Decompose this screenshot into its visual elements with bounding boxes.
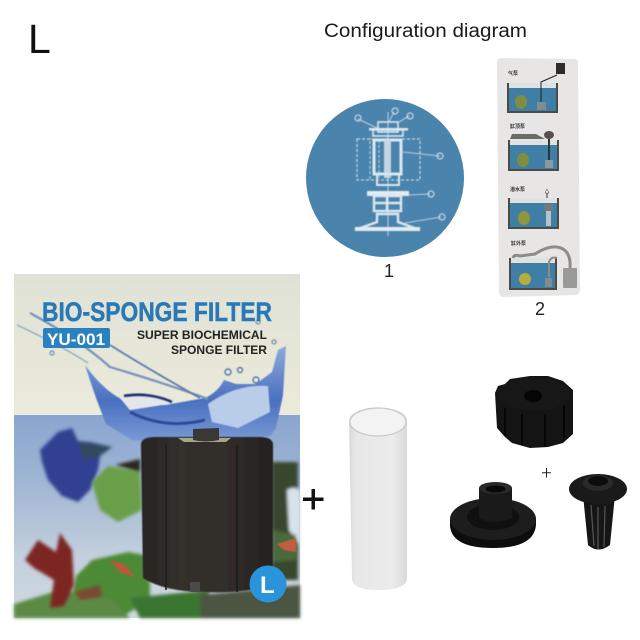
- product box: [14, 274, 300, 618]
- subtitle: SPONGE FILTER: [171, 345, 268, 357]
- small orange fish right: [277, 538, 296, 552]
- number 2 caption: 2: [535, 299, 545, 319]
- small plus sign: [542, 468, 551, 478]
- clear acrylic tube: [349, 408, 407, 590]
- exploded line drawing: [355, 108, 445, 236]
- panel: external pump: 缸外泵: [511, 240, 526, 247]
- panel: air pump: [507, 63, 565, 113]
- water splash: [17, 313, 286, 445]
- heading: configuration diagram: Configuration diagram: [324, 21, 527, 42]
- panel: submersible pump: 潜水泵: [510, 186, 525, 193]
- number 1 caption: 1: [384, 261, 394, 281]
- panel: air pump: 气泵: [508, 70, 518, 77]
- panel: external pump: [509, 240, 577, 290]
- panel: submersible pump: [508, 186, 559, 229]
- box background: [14, 274, 300, 618]
- small orange fish: [110, 560, 135, 577]
- sponge filter: [141, 428, 273, 592]
- black suction base: [450, 482, 536, 548]
- subtitle: [137, 330, 268, 357]
- black strainer insert: [569, 474, 627, 550]
- green plants: [14, 459, 300, 618]
- large plus sign: [303, 489, 324, 510]
- model badge: YU-001: [47, 330, 105, 349]
- red betta fish: [25, 533, 102, 608]
- panel: filter pump: 缸顶泵: [510, 123, 525, 130]
- L size badge: [250, 566, 286, 602]
- size label L: L: [28, 16, 51, 62]
- blue betta fish: [40, 428, 112, 502]
- title: BIO-SPONGE FILTER: [42, 297, 272, 327]
- black sponge cartridge: [495, 376, 573, 448]
- underwater background: [14, 415, 300, 618]
- diagram 2: installation card: [497, 58, 580, 297]
- panel: filter pump: [508, 123, 559, 171]
- subtitle: SUPER BIOCHEMICAL: [137, 330, 267, 342]
- L size badge: L: [260, 572, 275, 599]
- diagram 1: exploded filter in blue circle: [306, 99, 464, 257]
